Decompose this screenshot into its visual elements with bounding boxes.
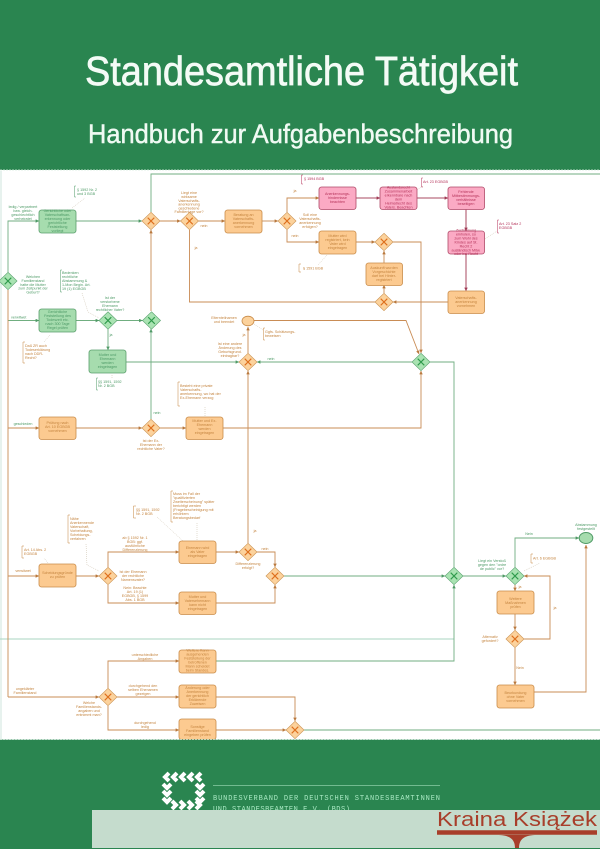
task: mother and husband registered: Mutter und: [99, 353, 116, 357]
task: mother and husband registered: werden: [101, 361, 114, 365]
label: established: Abstammung: [575, 523, 597, 527]
label: family status question: Familienstand: [22, 279, 44, 283]
note: legal parentage: 1-Mon Begin. Art.: [62, 283, 90, 287]
label: married abroad: geschieden: [14, 422, 32, 426]
label: branch upper: ausführliche: [125, 544, 145, 548]
task: consultation: vornehmen: [234, 225, 253, 229]
label: branch upper: BGB: ggf.: [127, 540, 143, 544]
label: no / yes at recognition: nein: [201, 224, 207, 228]
gateway: ex-husband: [142, 419, 160, 437]
task: mother and ex-husband: [186, 417, 223, 440]
label: single status: ledig / verpartnert: [9, 205, 37, 209]
task: registration without father: [497, 685, 534, 708]
note: declaration of death: nach DDR-: [25, 352, 44, 356]
label: unclear status: Familienstand: [14, 691, 36, 695]
task: obtain consent: zum Wohl des: [454, 236, 478, 240]
label: branch lower: Nein: Beachte: [123, 586, 147, 590]
task: mother and husband registered: Ehemann: [100, 357, 115, 361]
label: husband question: Namensvater?: [121, 578, 145, 582]
note: § 1592 Nr. 2: [74, 186, 97, 197]
gateway: ordre public: [506, 567, 524, 585]
task: inconsistent status: Weitere Kann: [186, 648, 209, 652]
note: § 1592 Nr. 2: § 1592 Nr. 2: [77, 188, 97, 192]
task: recognition obstacles: [319, 187, 356, 210]
gateway: other change: [239, 353, 257, 371]
task: mother and ex-husband: Ehemann: [197, 423, 212, 427]
task: perform recognition: anerkennung: [455, 300, 477, 304]
task: recognition obstacles: Anerkennungs-: [325, 192, 351, 196]
note: private recognition: Besteht eine private: [180, 384, 213, 388]
gateway: family status: [0, 272, 17, 290]
label: consistently single: durchgehend: [134, 721, 156, 725]
note: paternity procedure: Anerkennende: [70, 521, 94, 525]
label: other change question: eintragbar?: [221, 354, 239, 358]
connectors: sequence flows: [8, 174, 600, 730]
note: paternity procedure: verfahren: [70, 537, 86, 541]
note: §§ 1591, 1592: Nr. 2 BGB: [98, 384, 115, 388]
task: further measures: [497, 591, 534, 614]
label: husband question: Ist der Ehemann: [119, 570, 147, 574]
task: information: Vorgeschichte: [372, 270, 396, 274]
note: § 1592 Nr. 2: und 3 BGB: [77, 192, 96, 196]
note: qualified second declaration: (Fragebescheinigung mit: [173, 508, 214, 512]
note: art. 23 Satz 2: [498, 220, 521, 233]
task: divorce reasons: zu prüfen: [50, 575, 65, 579]
task: registration without father: Beurkundung: [505, 691, 526, 695]
label: recognition wanted question: Vaterschafts-: [299, 217, 321, 221]
note: art. 23 Satz 2: Art. 23 Satz 2: [499, 222, 521, 226]
task: consultation: Beratung an: [233, 213, 254, 217]
note: legal parentage: [60, 270, 90, 292]
task: husband entered as father: [179, 541, 216, 564]
task: inconsistent status: ausgehenden: [186, 652, 209, 656]
task: mother and father entry: [179, 592, 216, 614]
label: end event text: Elternteilnamen: [211, 316, 237, 320]
task: further measures: Maßnahmen: [505, 601, 526, 605]
label: flow outcomes: [516, 532, 557, 670]
label: ordre public: de public" vor?: [480, 567, 504, 571]
label: branch lower: Art. 19 (1): [127, 590, 143, 594]
publisher name: BUNDESVERBAND DER DEUTSCHEN STANDESBEAMTINNEN: [213, 795, 440, 803]
gateway: recognition wanted: [278, 212, 296, 230]
task: mother and ex-husband: Mutter und Ex-: [192, 419, 217, 423]
label: which status question: Welche: [83, 701, 95, 705]
note: qualified second declaration: Beratungsbedarf: [173, 516, 201, 520]
task: mother and father entry: Vatersehemann: [185, 599, 210, 603]
gateway: mother registered: [375, 233, 393, 251]
task: perform recognition: [448, 291, 484, 314]
label: recognition question: wirksame: [181, 195, 197, 199]
note: § 1591: § 1591 BGB: [303, 266, 324, 270]
label: consistent information: gezeigen: [136, 692, 150, 696]
label: recognition question: Liegt eine: [181, 191, 197, 195]
label: yes / no at recognition wanted: nein: [292, 234, 298, 238]
task: consistent status: Änderung oder: [185, 686, 210, 690]
task: other family status: eingeben prüfen: [184, 733, 211, 737]
task: foreign law: Vaters. Beachten: [384, 206, 413, 210]
label: alternative: gefordert?: [482, 639, 498, 643]
note: art. 14: [22, 546, 46, 558]
label: recognition question: anerkennung: [178, 202, 200, 206]
label: recognition wanted question: erfolgen?: [302, 225, 318, 229]
task: mother registered: eingetragen: [328, 246, 347, 250]
task: check art. 10: Prüfung nach: [47, 421, 68, 425]
task: husband entered as father: eingetragen: [188, 554, 207, 558]
label: branch lower: EGBGB, § 1599: [122, 594, 148, 598]
task: missing consent: [448, 187, 484, 210]
label: single status: verheiratet: [14, 217, 32, 221]
task: inconsistent status: Mann scheidet: [186, 664, 209, 668]
note: qualified second declaration: [171, 491, 215, 522]
label: flow outcomes: Nein: [525, 532, 533, 536]
note: private recognition: anerkennung, wo hat der: [180, 392, 222, 396]
label: widowed: verwitwet: [11, 316, 26, 320]
label: single status: bzw. gleich-: [13, 209, 33, 213]
note: legal parentage: rechtliche: [62, 275, 78, 279]
label: family status question: Geburt?: [26, 290, 40, 294]
publisher rule: [213, 784, 440, 786]
label: recognition question: Familienlage vor?: [174, 210, 204, 214]
gateway: which status: [99, 688, 117, 706]
task: obtain consent: [448, 228, 484, 256]
note: private recognition: Vaterschafts-: [180, 388, 202, 392]
task: inconsistent status: [179, 648, 216, 673]
task: consultation: Vaterschafts-: [233, 217, 255, 221]
task: recognition check: gerichtliche: [48, 221, 67, 225]
task: consistent status: Erklärende: [189, 698, 206, 702]
task: information: Auskunft wurden: [370, 266, 398, 270]
label: no / yes at recognition: [194, 224, 207, 250]
gateway: main merge: [412, 353, 430, 371]
note: §§ 1591, 1592 lower: [134, 506, 160, 518]
note: paternity procedure: Scheidungs-: [70, 533, 91, 537]
label: flow outcomes: Nein: [516, 666, 524, 670]
label: inconsistent information: Angaben: [138, 657, 152, 661]
label: established: festgestellt: [577, 527, 595, 531]
task: court determination: Regel prüfen: [47, 326, 68, 330]
task: obtain consent: Zustimmung: [456, 228, 476, 232]
note: private recognition: Ex-Ehemann verzog: [180, 396, 213, 400]
note: qualified second declaration: Muss im Fall der: [173, 492, 201, 496]
note: art. 14: EGBGB: [24, 552, 38, 556]
label: deceased husband question: verstorbene: [100, 300, 120, 304]
task: obtain consent: ausländisch Mitw.: [452, 248, 480, 252]
task: mother and husband registered: [89, 350, 126, 373]
task: court determination: [39, 309, 76, 332]
note: declaration of death: Daß ZR auch: [25, 344, 47, 348]
label: deceased husband question: Ehemann: [102, 304, 118, 308]
task: recognition check: [39, 209, 76, 233]
logo: BDS chevron frame: [163, 773, 204, 809]
label: which status question: entnimmt man?: [76, 713, 102, 717]
note: legal parentage: Abstammung &: [62, 279, 88, 283]
gateway: final merge: [445, 567, 463, 585]
label: no / yes at recognition: ja: [194, 246, 198, 250]
watermark logo: Kraina Książek: [437, 808, 598, 848]
task: court determination: Feststellung des: [44, 314, 71, 318]
label: inconsistent information: unterschiedliche: [132, 653, 158, 657]
label: single status: geschlechtlich: [11, 213, 35, 217]
label: branch upper: ab § 1592 Nr. 1: [122, 536, 148, 540]
label: flow outcomes: ja: [553, 606, 557, 610]
task: foreign law: Auslandsrecht: [387, 186, 410, 190]
note: art. 23 Satz 2: EGBGB: [499, 226, 513, 230]
note: art. 14: Art. 14 Abs. 2: [24, 548, 46, 552]
note: declaration of death: Recht?: [25, 356, 37, 360]
label: other change question: Ist eine andere: [218, 342, 242, 346]
task: information: [366, 263, 402, 286]
label: yes / no at recognition wanted: ja: [293, 189, 297, 193]
title: Standesamtliche Tätigkeit: [85, 48, 519, 94]
label: recognition wanted question: Soll eine: [303, 213, 317, 217]
label: ex-husband question: rechtliche Vater?: [137, 447, 165, 451]
task: husband entered as father: als Vater: [190, 550, 205, 554]
note: qualified second declaration: berichtigt werden: [173, 504, 201, 508]
note: §§ 1591, 1592: [96, 378, 122, 390]
label: other change question: Änderung des: [219, 346, 242, 350]
label: end event text: und beendet: [214, 320, 234, 324]
task: mother registered: registriert, kein: [325, 238, 350, 242]
label: which status question: angaben und: [78, 709, 100, 713]
note: art. 6: Art. 6 EGBGB: [533, 556, 556, 560]
task: registration without father: vornehmen: [506, 699, 525, 703]
task: perform recognition: Vaterschafts-: [455, 296, 477, 300]
label: ex-husband question: Ist der Ex-: [143, 439, 160, 443]
task: consistent status: Zuweisen: [190, 702, 205, 706]
task: obtain consent: Recht 2: [460, 244, 472, 248]
task: mother and ex-husband: eingetragen: [195, 431, 214, 435]
task: husband entered as father: Ehemann wird: [186, 546, 209, 550]
label: differentiation: ja: [253, 529, 257, 533]
note: declaration of death: [23, 342, 50, 363]
gateway: differentiation: [239, 543, 257, 561]
label: differentiation: [236, 529, 268, 570]
task: obtain consent: Kindes auf St.: [455, 240, 477, 244]
note: qualified second declaration: Zweiterscheinung" später: [173, 500, 215, 504]
label: yes / no at recognition wanted: [292, 189, 298, 238]
note: qualified second declaration: erhöhtem: [173, 512, 189, 516]
label: consistent information: selben Ehenamen: [128, 688, 158, 692]
label: differentiation: nein: [262, 547, 268, 551]
label: which status question: Familienstands-: [76, 705, 103, 709]
label: consistently single: ledig: [141, 725, 149, 729]
gateway: merge bottom: [286, 721, 304, 739]
task: foreign law: Heimatrecht des: [385, 202, 412, 206]
label: no branch: nein: [268, 357, 274, 361]
task: foreign law: erkennbare nach: [385, 194, 412, 198]
label: other change question: Geburtsgrund.: [218, 350, 242, 354]
task: mother and father entry: kann nicht: [189, 603, 206, 607]
task: recognition check: erkennung oder: [45, 217, 71, 221]
task: foreign law: Zusammenarbeit: [385, 190, 412, 194]
label: no: nein: [154, 411, 160, 415]
note: estimate: Ggfs. Schätzungs-: [265, 330, 296, 334]
task: recognition obstacles: hindernisse: [328, 196, 347, 200]
task: mother registered: Vater wird: [329, 242, 346, 246]
task: court determination: Todeszeit etc.: [46, 318, 69, 322]
label: flow outcomes: ja: [518, 585, 522, 589]
label: differentiation: Differenzierung: [236, 562, 260, 566]
task: divorce reasons: [39, 564, 76, 587]
task: consistent status: der gerichtlich: [186, 694, 209, 698]
task: foreign law: dem: [395, 198, 402, 202]
task: recognition check: vorliegt: [52, 229, 63, 233]
note: paternity procedure: Nähe: [70, 517, 79, 521]
task: recognition check: Vaterschaftsan-: [45, 213, 71, 217]
task: recognition obstacles: beachten: [330, 200, 345, 204]
panel: process diagram: [0, 170, 600, 740]
end event: parentage established: [579, 532, 593, 544]
gateway: recognition present: [180, 212, 198, 230]
task: consultation: [225, 210, 262, 233]
label: branch lower: Abs. 1 BGB: [125, 598, 145, 602]
task: information: darf bei Hinter-: [372, 274, 397, 278]
task: missing consent: verhältnisse: [456, 198, 476, 202]
note: § 1594: § 1594 BGB: [304, 177, 325, 181]
task: check art. 10: Art. 10 EGBGB: [45, 425, 71, 429]
gateway: merge green: [142, 312, 160, 329]
task: information: registriert: [376, 278, 392, 282]
label: differentiation: erfolgt?: [242, 566, 254, 570]
label: yes: ja: [109, 333, 113, 337]
note: § 1594: [302, 175, 325, 184]
task: missing consent: beseitigen: [458, 202, 474, 206]
subtitle: Handbuch zur Aufgabenbeschreibung: [88, 119, 513, 149]
label: consistent information: durchgehend den: [129, 684, 157, 688]
label: yes branch: ja: [242, 333, 246, 337]
note: §§ 1591, 1592 lower: §§ 1591, 1592: [136, 508, 160, 512]
note: estimate: beweisen: [265, 334, 281, 338]
task: recognition check: Feststellung: [48, 225, 67, 229]
task: court determination: Gerichtliche: [48, 310, 67, 314]
task: other family status: [179, 719, 216, 740]
label: ordre public: Liegt ein Verstoß: [478, 559, 507, 563]
task: consistent status: [179, 685, 216, 708]
label: alternative: Alternativ: [482, 635, 498, 639]
label: family status question: Welchen: [26, 275, 40, 279]
label: husband question: der rechtliche: [122, 574, 144, 578]
gateway: information: [375, 293, 393, 311]
task: foreign law: [380, 186, 417, 210]
task: divorce reasons: Scheidungsgründe: [42, 571, 73, 575]
label: recognition wanted question: anerkennung: [299, 221, 321, 225]
note: paternity procedure: [68, 515, 94, 543]
label: divorced: verwitwet: [15, 569, 31, 573]
label: recognition question: geschiedene: [179, 206, 199, 210]
gateway: alternative: [506, 630, 524, 648]
task: further measures: Weitere: [509, 597, 522, 601]
task: check art. 10: [39, 417, 76, 440]
annotations: dotted association lines: [44, 186, 540, 571]
task: consultation: anerkennung: [233, 221, 254, 225]
task: inconsistent status: Feststellung der: [184, 656, 211, 660]
task: inconsistent status: betroffenen: [188, 660, 207, 664]
note: art. 6: [531, 554, 556, 563]
task: court determination: nach 300 Tage: [45, 322, 70, 326]
task: missing consent: Fehlende: [458, 190, 474, 194]
task: mother and father entry: eingetragen: [188, 607, 207, 611]
publisher name: [213, 795, 440, 814]
task: other family status: Sonstige: [190, 725, 205, 729]
task: missing consent: Mitbestimmungs-: [452, 194, 481, 198]
task: mother and husband registered: eingetragen: [98, 365, 117, 369]
label: ordre public: gegen den "ordre: [478, 563, 506, 567]
end event: parents named: [242, 316, 254, 326]
task: mother registered: [319, 231, 356, 254]
task: inconsistent status: beim Standes.: [186, 668, 209, 672]
gateway: merge top: [142, 212, 160, 230]
pale band: [92, 810, 600, 848]
watermark logo: Kraina Książek: Kraina Książek: [437, 808, 598, 831]
task: obtain consent: oder bei Recht: [454, 252, 478, 256]
task: registration without father: ohne Vater: [507, 695, 525, 699]
note: art. 23 EGBGB: [422, 178, 449, 187]
note: estimate: [264, 328, 296, 340]
publisher name: UND STANDESBEAMTEN E.V. (BDS): [213, 806, 350, 814]
label: recognition question: Vaterschafts-: [178, 199, 200, 203]
gateway: deceased husband: [99, 312, 117, 329]
task: mother and ex-husband: werden: [198, 427, 211, 431]
note: §§ 1591, 1592 lower: Nr. 2 BGB: [136, 512, 153, 516]
panel edge: dashed lines: [0, 170, 600, 740]
label: family status question: hatte die Mutter: [20, 283, 47, 287]
task: perform recognition: vornehmen: [457, 304, 475, 308]
note: paternity procedure: Vaterschaft,: [70, 525, 89, 529]
task: obtain consent: einholen, so: [456, 232, 476, 236]
task: consistent status: Anerkennung: [187, 690, 208, 694]
label: unclear status: ungeklärter: [16, 687, 35, 691]
note: art. 23 EGBGB: Art. 23 EGBGB: [423, 180, 449, 184]
note: legal parentage: 19 (1) EGBGB: [62, 287, 86, 291]
task: mother registered: Mutter wird: [328, 234, 347, 238]
label: ex-husband question: Ehemann der: [140, 443, 163, 447]
label: branch upper: Differenzierung: [123, 548, 147, 552]
task: check art. 10: vornehmen: [48, 429, 67, 433]
note: qualified second declaration: "qualifizierten: [173, 496, 195, 500]
note: §§ 1591, 1592: §§ 1591, 1592: [98, 380, 122, 384]
note: declaration of death: Todeserklärung: [25, 348, 50, 352]
note: legal parentage: Bedenken: [62, 271, 79, 275]
note: § 1591: [299, 264, 324, 272]
gateway: merge lower: [266, 567, 284, 585]
label: deceased husband question: rechtlicher Vater?: [96, 308, 124, 312]
task: further measures: prüfen: [510, 605, 521, 609]
note: paternity procedure: Vorbehaltung,: [70, 529, 93, 533]
task: other family status: Familienstand: [186, 729, 209, 733]
label: deceased husband question: Ist der: [105, 296, 116, 300]
label: family status question: zum Zeitpunkt der: [18, 286, 49, 290]
gateway: husband legal father: [99, 567, 117, 585]
note: private recognition: [178, 382, 222, 406]
task: mother and father entry: Mutter und: [189, 595, 206, 599]
task: recognition check: Gerichtliche oder: [44, 209, 72, 213]
